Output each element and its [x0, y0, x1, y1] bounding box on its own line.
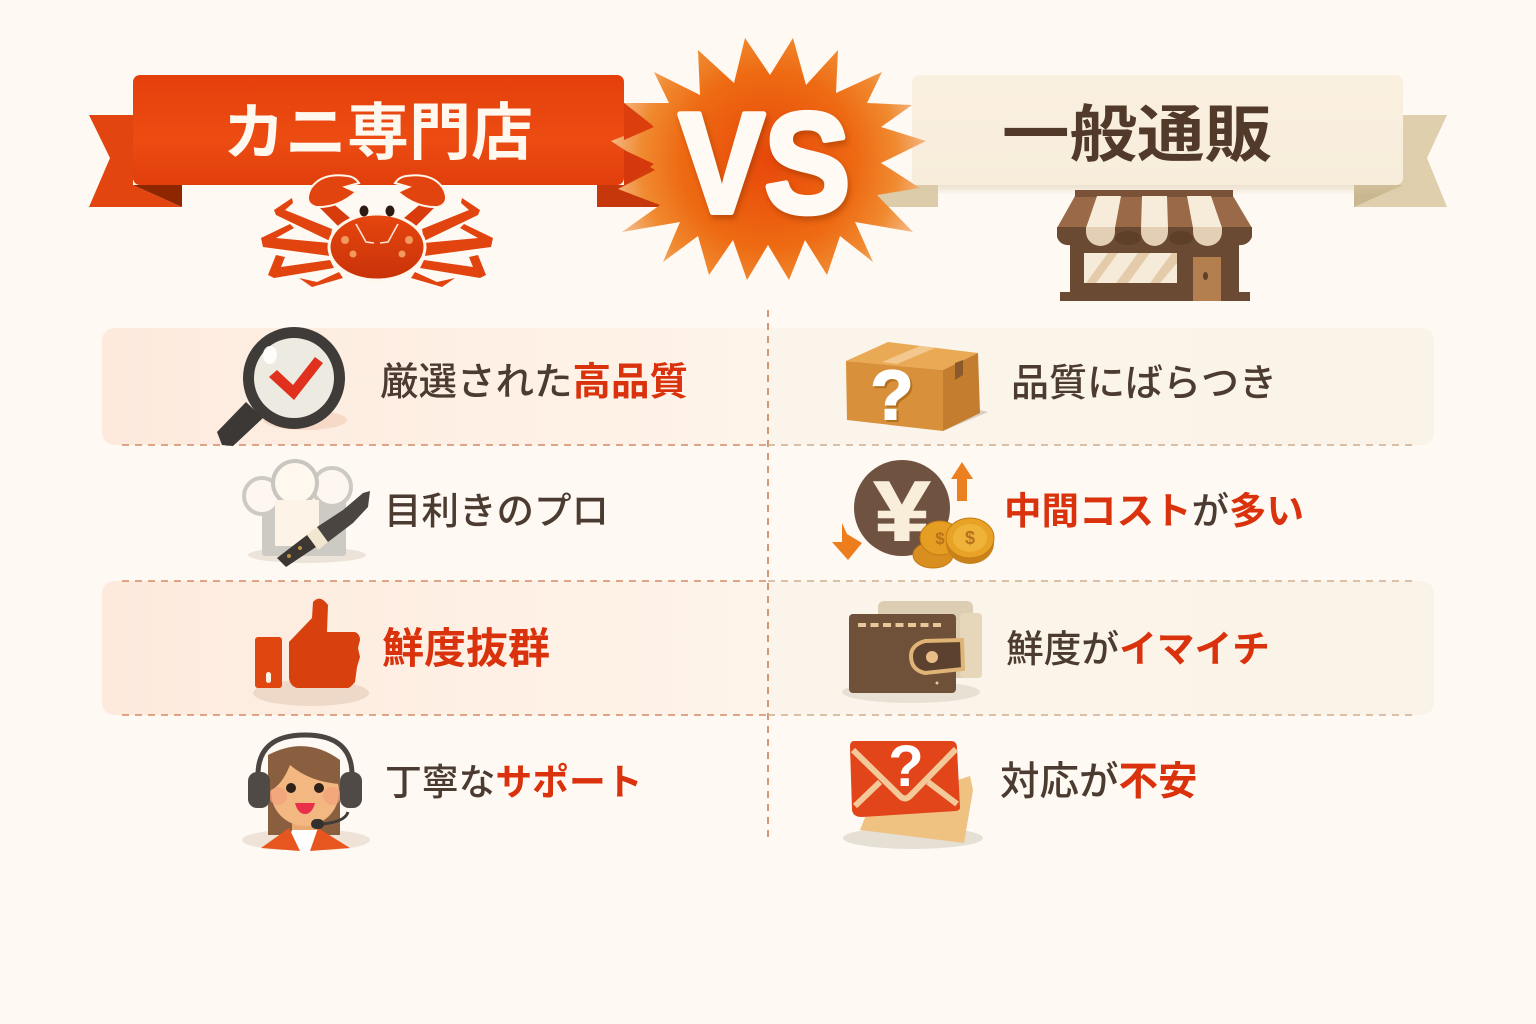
row 1 left: high quality [217, 332, 688, 446]
icon: envelope with question mark [843, 734, 983, 849]
crab body [329, 214, 425, 280]
comparison table [102, 310, 1434, 851]
heading: カニ専門店 [223, 99, 533, 168]
label: 鮮度抜群 [382, 625, 550, 672]
row highlight panels [102, 328, 1434, 715]
header banner: 一般通販 [870, 75, 1447, 207]
icon: magnifier with check [217, 332, 347, 446]
ribbon shadow [916, 172, 1400, 190]
row 2 left: expert eye [244, 461, 609, 567]
icon: yen coin with arrows: $ [935, 529, 945, 548]
icon: storefront [1057, 190, 1252, 301]
crab right legs and claw [395, 175, 493, 287]
crab left legs and claw [261, 175, 359, 287]
icon: wallet [842, 601, 982, 703]
ribbon tail left [89, 115, 182, 207]
ribbon main [912, 75, 1403, 185]
row 1 right: inconsistent quality [846, 342, 1277, 434]
icon: crab [261, 175, 493, 287]
icon: chef hat and knife [244, 461, 370, 567]
crab face [341, 206, 413, 258]
row 4 left: attentive support [242, 735, 643, 851]
store base [1060, 292, 1250, 301]
icon: envelope with question mark: ? [888, 734, 924, 799]
icon: support agent with headset [242, 735, 370, 851]
label: 丁寧なサポート [385, 762, 643, 803]
row 3 left: outstanding freshness [253, 599, 550, 706]
VS starburst [611, 38, 926, 280]
label: 鮮度がイマイチ [1006, 628, 1270, 670]
icon: mystery box [846, 342, 988, 434]
header banner: カニ専門店 [89, 75, 670, 207]
row 3 right: mediocre freshness [842, 601, 1270, 703]
label: 対応が不安 [1000, 760, 1198, 804]
row 4 right: uneasy response [843, 734, 1198, 849]
VS text: VS [679, 84, 850, 243]
red ribbon folds over burst [624, 103, 654, 185]
icon: mystery box: ? [871, 356, 913, 434]
ribbon tail pieces [870, 115, 1447, 207]
dividers [122, 310, 1414, 840]
icon: yen coin with arrows: ¥ [874, 464, 930, 558]
ribbon folds [133, 103, 670, 207]
label: 目利きのプロ [384, 490, 609, 532]
awning [1057, 190, 1252, 246]
store door [1193, 257, 1221, 301]
heading: 一般通販 [1002, 101, 1272, 170]
row 2 right: high middle cost [832, 460, 1304, 568]
label: 品質にばらつき [1011, 363, 1277, 405]
store building [1070, 240, 1239, 292]
icon: thumbs up [253, 599, 369, 706]
store window [1084, 253, 1177, 283]
icon: yen coin with arrows [832, 460, 994, 568]
ribbon main [133, 75, 624, 185]
burst shape [611, 38, 926, 280]
icon: yen coin with arrows: $ [965, 528, 975, 548]
label: 中間コストが多い [1004, 490, 1304, 532]
label: 厳選された高品質 [380, 361, 688, 404]
